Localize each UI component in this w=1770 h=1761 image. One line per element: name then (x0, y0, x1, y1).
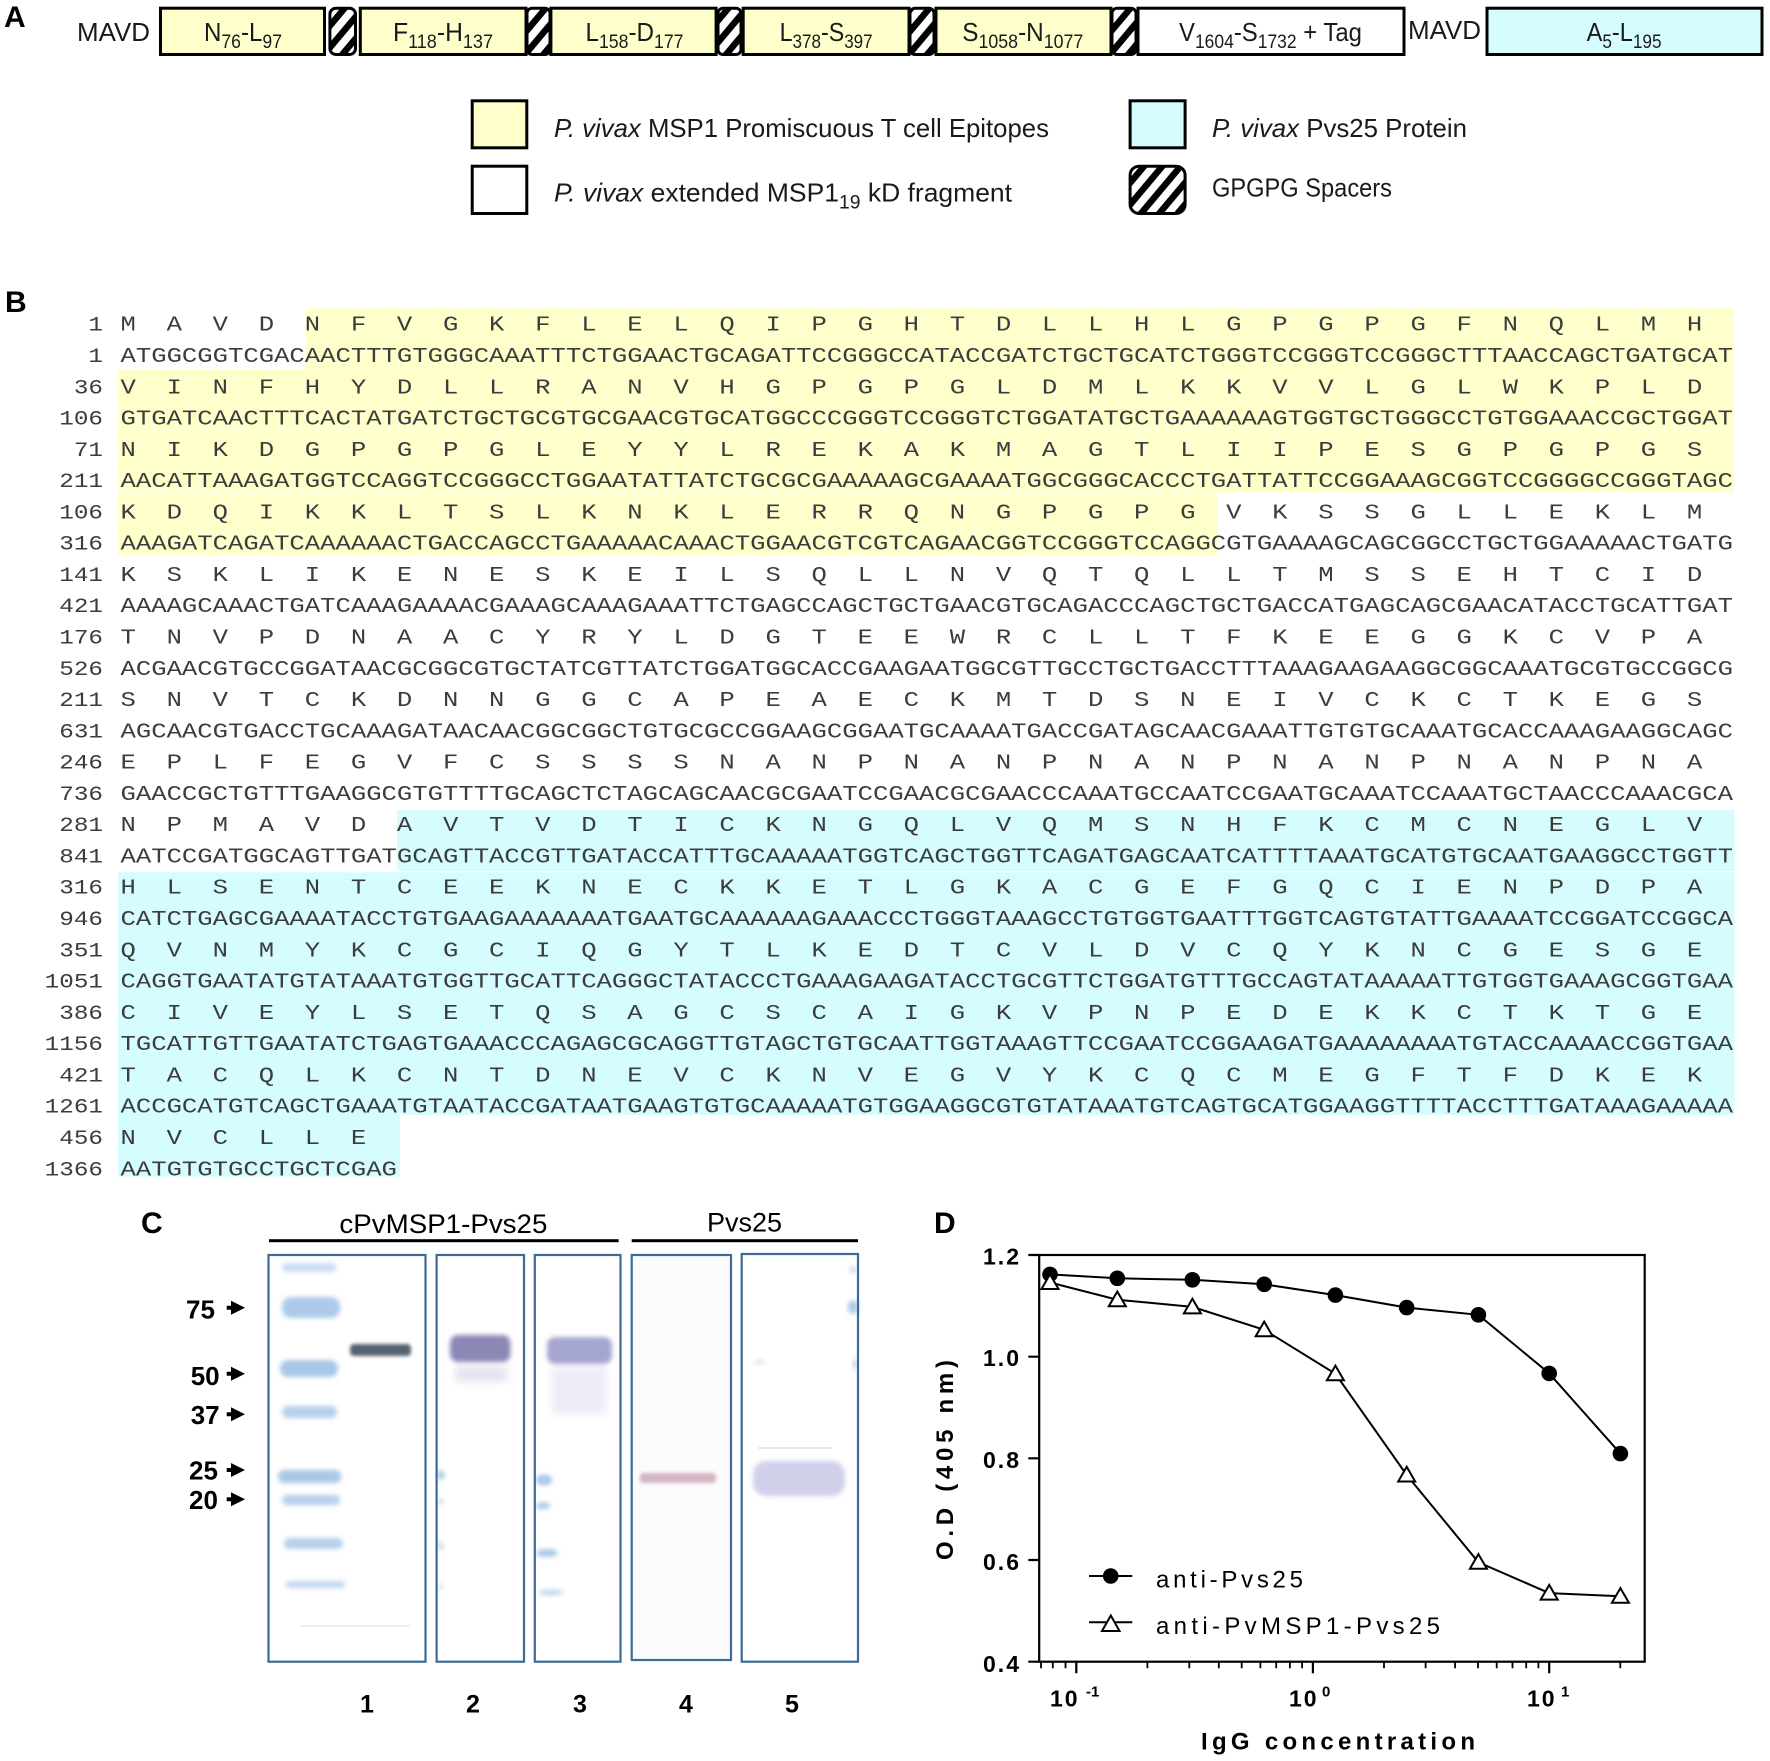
sequence rows 281: 281 (59, 814, 103, 838)
sequence rows 211 (59, 689, 1733, 745)
segment N76-L97 (160, 8, 324, 54)
lane 4: band (632, 1255, 731, 1660)
sequence rows 71: 211 (59, 470, 103, 494)
sequence rows 1: 1 (88, 345, 103, 368)
sequence rows 351: Q V N M Y K C G C I Q G Y T L K E D T C V L D V C Q Y K N C G E S G E (120, 939, 1702, 964)
segment L158-D177: -D (628, 17, 654, 47)
x axis tick labels (1050, 1684, 1569, 1712)
sequence rows 1 (88, 313, 1733, 369)
sequence rows 71: N I K D G P G P G L E Y Y L R E K A K M A G T L I I P E S G P G P G S (120, 439, 1702, 463)
x axis tick labels: 0 (1322, 1684, 1330, 1701)
lane numbers: 2 (466, 1691, 480, 1719)
sequence rows 281: 841 (59, 845, 103, 869)
legend: Pvs25 protein (1130, 101, 1467, 148)
MAVD linker: MAVD (1408, 15, 1481, 45)
sequence rows 176: 526 (59, 657, 103, 681)
group heading: cPvMSP1-Pvs25 (269, 1209, 619, 1242)
panel label C: C (141, 1207, 163, 1240)
sequence rows 71: AACATTAAAGATGGTCCAGGTCCGGGCCTGGAATATTATCTGCGCGAAAAAGCGAAAATGGCGGGCACCCTGATTATTCCGGAAAGCGGTCCGGGGCCGGGTAGC (120, 470, 1733, 494)
legend: anti-Pvs25: anti-Pvs25 (1156, 1566, 1305, 1593)
sequence rows 316: CATCTGAGCGAAAATACCTGTGAAGAAAAAAATGAATGCAAAAAAGAAACCCTGGGTAAAGCCTGTGGTGAATTTGGTCAGTGTATTGAAAATCCGGATCCGGCA (120, 908, 1734, 932)
segment S1058-N1077: 1058 (979, 32, 1018, 53)
segment A5-L195: 5 (1602, 32, 1612, 53)
segment N76-L97: 97 (262, 32, 282, 53)
marker 25 (189, 1455, 245, 1485)
segment N76-L97: 76 (221, 32, 241, 53)
sequence rows 316 (59, 876, 1734, 932)
sequence rows 71: 71 (74, 438, 103, 462)
segment F118-H137: 137 (463, 32, 493, 53)
sequence rows 36: 106 (59, 407, 103, 431)
sequence rows 281: N P M A V D A V T V D T I C K N G Q L V Q M S N H F K C M C N E G L V (120, 814, 1702, 838)
sequence rows 1: ATGGCGGTCGACAACTTTGTGGGCAAATTTCTGGAACTGCAGATTCCGGGCCATACCGATCTGCTGCATCTGGGTCCGGGTCCGGGCTTTAACCAGCTGATGCAT (120, 345, 1733, 369)
segment L158-D177: L (586, 17, 600, 47)
legend: GPGPG spacers (1130, 166, 1392, 214)
spacer 5 (1112, 8, 1136, 54)
segment S1058-N1077 (936, 8, 1111, 54)
legend: anti-PvMSP1-Pvs25: anti-PvMSP1-Pvs25 (1156, 1613, 1442, 1640)
sequence rows 106: K D Q I K K L T S L K N K L E R R Q N G P G P G V K S S G L L E K L M (120, 501, 1702, 526)
segment L158-D177: 158 (599, 32, 628, 53)
sequence rows 176 (59, 626, 1733, 682)
panel label B: B (5, 286, 27, 319)
y axis tick labels: 1.0 (983, 1345, 1021, 1371)
x axis tick labels: 10 (1050, 1686, 1080, 1712)
y axis tick labels: 1.2 (983, 1244, 1021, 1270)
legend: MSP1 19 kD fragment: kD fragment (860, 178, 1013, 208)
series: anti-Pvs25 (1042, 1267, 1628, 1461)
sequence rows 36: 36 (74, 376, 103, 400)
sequence rows 176: 176 (59, 626, 103, 650)
sequence rows 281: AATCCGATGGCAGTTGATGCAGTTACCGTTGATACCATTTGCAAAAATGGTCAGCTGGTTCAGATGAGCAATCATTTTAAATGCATGTGCAATGAAGGCCTGGTT (120, 845, 1733, 870)
marker 75 (186, 1294, 245, 1324)
group heading: cPvMSP1-Pvs25: cPvMSP1-Pvs25 (339, 1209, 547, 1239)
segment A5-L195 (1487, 8, 1762, 54)
segment S1058-N1077: 1077 (1044, 32, 1083, 53)
marker 50 (191, 1361, 245, 1391)
panel D: ELISA dose-response chart (932, 1207, 1645, 1755)
legend: MSP1 19 kD fragment (472, 166, 1013, 214)
sequence rows 351: CAGGTGAATATGTATAAATGTGGTTGCATTCAGGGCTATACCCTGAAAGAAGATACCTGCGTTCTGGATGTTTGCCAGTATAAAAATTGTGGTGAAAGCGGTGAA (120, 970, 1734, 995)
segment A5-L195: A (1587, 17, 1604, 47)
sequence rows 1: M A V D N F V G K F L E L Q I P G H T D L L H L G P G P G F N Q L M H (120, 314, 1702, 338)
legend: MSP1 epitopes (472, 101, 1049, 148)
segment A5-L195: 195 (1633, 32, 1662, 53)
yellow highlight: promiscuous T cell epitopes (118, 308, 1734, 555)
sequence rows 456: AATGTGTGCCTGCTCGAG (120, 1158, 397, 1183)
y axis tick labels: 0.6 (983, 1549, 1021, 1575)
y axis title: O.D (405 nm) (932, 1357, 959, 1560)
segment V1604-S1732 + Tag: 1604 (1195, 32, 1234, 53)
sequence rows 141: AAAAGCAAACTGATCAAAGAAAACGAAAGCAAAGAAATTCTGAGCCAGCTGCTGAACGTGCAGACCCAGCTGCTGACCATGAGCAGCGAACATACCTGCATTGAT (120, 595, 1733, 619)
x axis tick labels: 10 (1527, 1686, 1557, 1712)
sequence rows 106 (59, 501, 1733, 557)
marker 37: 37 (191, 1400, 220, 1430)
segment L158-D177 (551, 8, 716, 54)
legend: GPGPG spacers: GPGPG Spacers (1212, 172, 1392, 202)
marker 75: 75 (186, 1294, 215, 1324)
y axis tick labels: 0.8 (983, 1447, 1021, 1473)
x axis tick labels: -1 (1086, 1684, 1099, 1701)
sequence rows 386: 1156 (45, 1033, 103, 1057)
y axis tick labels (983, 1244, 1021, 1677)
sequence rows 211: AGCAACGTGACCTGCAAAGATAACAACGGCGGCTGTGCGCCGGAAGCGGAATGCAAAATGACCGATAGCAACGAAATTGTGTGCAAATGCACCAAAGAAGGCAGC (120, 720, 1733, 745)
segment F118-H137: 118 (408, 32, 437, 53)
sequence rows 71 (59, 438, 1733, 494)
segment L378-S397: -S (821, 17, 844, 47)
sequence rows 456: N V C L L E (120, 1127, 366, 1151)
sequence rows 421: ACCGCATGTCAGCTGAAATGTAATACCGATAATGAAGTGTGCAAAAATGTGGAAGGCGTGTATAAATGTCAGTGCATGGAAGGTTTTACCTTTGATAAAGAAAAA (120, 1096, 1734, 1120)
group heading: Pvs25 (632, 1208, 858, 1242)
sequence rows 176: T N V P D N A A C Y R Y L D G T E E W R C L L T F K E E G G K C V P A (120, 626, 1703, 651)
sequence rows 211: 631 (59, 720, 103, 744)
sequence rows 211: S N V T C K D N N G G C A P E A E C K M T D S N E I V C K C T K E G S (120, 689, 1702, 713)
MAVD prefix: MAVD (77, 17, 150, 47)
marker 37 (191, 1400, 245, 1430)
x axis tick labels: 10 (1289, 1686, 1319, 1712)
segment N76-L97: N (204, 17, 223, 47)
segment S1058-N1077: S (962, 17, 980, 47)
sequence rows 386 (45, 1001, 1734, 1057)
segment S1058-N1077: -N (1018, 17, 1044, 47)
marker 50: 50 (191, 1361, 220, 1391)
segment L378-S397: L (780, 17, 794, 47)
sequence rows 316: H L S E N T C E E K N E C K K E T L G K A C G E F G Q C I E N P D P A (120, 877, 1703, 901)
lane numbers: 1 (360, 1691, 374, 1719)
sequence rows 386: C I V E Y L S E T Q S A G C S C A I G K V P N P E D E K K C T K T G E (120, 1002, 1702, 1026)
plot frame and axes (1028, 1255, 1645, 1673)
group heading: Pvs25: Pvs25 (707, 1208, 782, 1238)
sequence rows 386: 386 (59, 1001, 103, 1025)
legend: MSP1 epitopes: P. vivax MSP1 Promiscuous T cell Epitopes (554, 113, 1049, 143)
marker 20 (189, 1485, 245, 1515)
sequence rows 246: E P L F E G V F C S S S S N A N P N A N P N A N P N A N P N A N P N A (120, 751, 1703, 776)
sequence rows 211: 211 (59, 689, 103, 713)
segment L158-D177: 177 (654, 32, 684, 53)
segment F118-H137: -H (437, 17, 463, 47)
segment V1604-S1732 + Tag: -S (1234, 17, 1258, 47)
segment L378-S397: 378 (793, 32, 821, 53)
lane 1: marker and band (268, 1255, 426, 1662)
cyan highlight: Pvs25 protein (118, 810, 1734, 1177)
marker 20: 20 (189, 1485, 218, 1515)
sequence rows 176: ACGAACGTGCCGGATAACGCGGCGTGCTATCGTTATCTGGATGGCACCGAAGAATGGCGTTGCCTGCTGACCTTTAAAGAAGAAGGCGGCAAATGCGTGCCGGCG (120, 658, 1733, 682)
lane 5: band (742, 1254, 858, 1662)
sequence rows 351: 1051 (45, 970, 103, 994)
sequence rows 246: 246 (59, 751, 103, 775)
sequence rows 36: GTGATCAACTTTCACTATGATCTGCTGCGTGCGAACGTGCATGGCCCGGGTCCGGGTCTGGATATGCTGAAAAAAGTGGTGCTGGGCCTGTGGAAACCGCTGGAT (120, 407, 1733, 432)
legend: MSP1 19 kD fragment: P. vivax extended MSP1 (554, 178, 836, 208)
legend: MSP1 19 kD fragment: 19 (839, 192, 860, 214)
segment N76-L97: -L (241, 17, 262, 47)
sequence rows 421: T A C Q L K C N T D N E V C K N V E G V Y K C Q C M E G F T F D K E K (120, 1064, 1703, 1089)
segment V1604-S1732 + Tag (1138, 8, 1404, 54)
sequence rows 36: V I N F H Y D L L R A N V H G P G P G L D M L K K V V L G L W K P L D (120, 376, 1702, 401)
segment L378-S397: 397 (844, 32, 873, 53)
sequence rows 421 (45, 1064, 1734, 1120)
x axis title: IgG concentration (1201, 1728, 1478, 1755)
panel label A: A (4, 1, 26, 34)
x axis tick labels: 1 (1561, 1684, 1569, 1701)
spacer 4 (910, 8, 934, 54)
sequence rows 36 (59, 376, 1733, 432)
lane 2: band (437, 1255, 524, 1662)
sequence rows 246: GAACCGCTGTTTGAAGGCGTGTTTTGCAGCTCTAGCAGCAACGCGAATCCGAACGCGAACCCAAATGCCAATCCGAATGCAAATCCAAATGCTAACCCAAACGCA (120, 783, 1734, 807)
segment V1604-S1732 + Tag: + Tag (1297, 17, 1362, 47)
marker 25: 25 (189, 1455, 218, 1485)
panel A: construct schematic (4, 1, 1762, 214)
sequence rows 421: 1261 (45, 1095, 103, 1119)
segment F118-H137 (360, 8, 526, 54)
sequence rows 141: 141 (59, 563, 103, 587)
sequence rows 106: 106 (59, 501, 103, 525)
panel B: annotated sequence (5, 286, 1734, 1183)
lane numbers (360, 1691, 799, 1719)
sequence rows 456: 1366 (45, 1158, 103, 1182)
sequence rows 141: 421 (59, 595, 103, 619)
y axis tick labels: 0.4 (983, 1651, 1021, 1677)
spacer 3 (718, 8, 741, 54)
sequence rows 246 (59, 751, 1734, 807)
lane numbers: 5 (785, 1691, 799, 1719)
sequence rows 386: TGCATTGTTGAATATCTGAGTGAAACCCAGAGCGCAGGTTGTAGCTGTGCAATTGGTAAAGTTCCGAATCCGGAAGATGAAAAAAAATGTACCAAAACCGGTGAA (120, 1033, 1734, 1057)
series: anti-PvMSP1-Pvs25 (1042, 1274, 1629, 1603)
sequence rows 316: 316 (59, 876, 103, 900)
segment A5-L195: -L (1612, 17, 1633, 47)
sequence rows 141 (59, 563, 1733, 619)
lane 3: band (535, 1255, 620, 1662)
sequence rows 141: K S K L I K E N E S K E I L S Q L L N V Q T Q L L T M S S E H T C I D (120, 564, 1702, 588)
sequence rows 246: 736 (59, 782, 103, 806)
lane numbers: 3 (573, 1691, 587, 1719)
sequence rows 1: 1 (88, 313, 103, 337)
legend: anti-Pvs25 (1089, 1566, 1305, 1593)
segment F118-H137: F (393, 17, 409, 47)
spacer 2 (527, 8, 550, 54)
legend: Pvs25 protein: P. vivax Pvs25 Protein (1212, 113, 1467, 143)
panel label D: D (934, 1207, 956, 1240)
sequence rows 106: 316 (59, 532, 103, 556)
lane numbers: 4 (679, 1691, 693, 1719)
sequence rows 281 (59, 814, 1733, 870)
sequence rows 456: 456 (59, 1127, 103, 1150)
spacer 1 (330, 8, 356, 54)
segment V1604-S1732 + Tag: V (1179, 17, 1196, 47)
sequence rows 351: 351 (59, 939, 103, 963)
sequence rows 351 (45, 939, 1734, 995)
panel C: gel and western blots (141, 1207, 858, 1719)
sequence rows 421: 421 (59, 1064, 103, 1088)
sequence rows 456 (45, 1127, 397, 1183)
sequence rows 316: 946 (59, 908, 103, 931)
segment V1604-S1732 + Tag: 1732 (1258, 32, 1297, 53)
segment L378-S397 (743, 8, 909, 54)
sequence rows 106: AAAGATCAGATCAAAAAACTGACCAGCCTGAAAAACAAACTGGAACGTCGTCAGAACGGTCCGGGTCCAGGCGTGAAAAGCAGCGGCCTGCTGGAAAAACTGATG (120, 533, 1733, 557)
